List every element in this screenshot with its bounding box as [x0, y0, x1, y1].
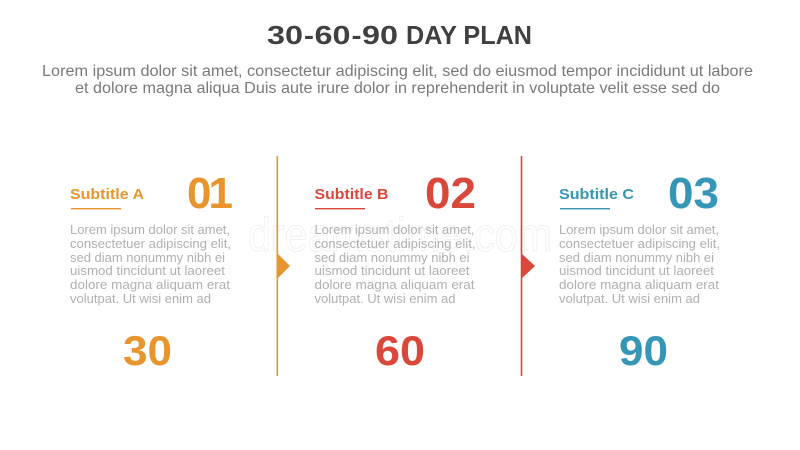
body text C: dolore magna aliquam erat: [559, 278, 720, 292]
underline C: [560, 208, 610, 209]
title: -: [304, 22, 314, 50]
body text B: volutpat. Ut wisi enim ad: [314, 292, 456, 306]
body text C: [559, 223, 720, 306]
body text C: uismod tincidunt ut laoreet: [559, 264, 715, 278]
intro text: Lorem ipsum dolor sit amet, consectetur adipiscing elit, sed do eiusmod tempor incididunt ut labore: [42, 63, 753, 80]
panel: subtitle A, 30 days: [70, 169, 233, 374]
day count 90: 90: [619, 327, 668, 374]
body text B: dolore magna aliquam erat: [314, 278, 475, 292]
body text B: [314, 223, 476, 306]
number 03: 03: [668, 169, 719, 218]
body text A: consectetuer adipiscing elit,: [70, 237, 231, 251]
body text A: volutpat. Ut wisi enim ad: [70, 292, 211, 306]
underline A: [71, 208, 121, 209]
panel: subtitle C, 90 days: [559, 169, 720, 374]
panel: subtitle B, 60 days: [314, 169, 476, 374]
body text B: uismod tincidunt ut laoreet: [314, 264, 470, 278]
body text B: consectetuer adipiscing elit,: [314, 237, 476, 251]
watermark: dreamstime.com: [248, 208, 552, 261]
title: 60: [314, 22, 350, 50]
subtitle A: Subtitle A: [70, 186, 144, 203]
body text A: uismod tincidunt ut laoreet: [70, 264, 226, 278]
title: -: [352, 22, 362, 50]
intro text: [42, 63, 753, 97]
underline B: [315, 208, 365, 209]
day count 60: 60: [375, 327, 425, 374]
body text A: dolore magna aliquam erat: [70, 278, 231, 292]
body text A: Lorem ipsum dolor sit amet,: [70, 223, 230, 237]
body text C: sed diam nonummy nibh ei: [559, 251, 714, 265]
body text B: sed diam nonummy nibh ei: [314, 251, 470, 265]
body text B: Lorem ipsum dolor sit amet,: [314, 223, 474, 237]
subtitle B: Subtitle B: [314, 186, 389, 203]
intro text: et dolore magna aliqua Duis aute irure dolor in reprehenderit in voluptate velit esse sed do: [75, 80, 720, 97]
title: DAY PLAN: [406, 22, 532, 50]
divider arrow: red: [521, 156, 535, 376]
divider arrow: orange: [276, 156, 290, 376]
body text C: volutpat. Ut wisi enim ad: [559, 292, 700, 306]
number 01: 01: [187, 169, 233, 218]
subtitle C: Subtitle C: [559, 186, 634, 203]
body text A: [70, 223, 231, 306]
day count 30: 30: [123, 327, 172, 374]
body text C: Lorem ipsum dolor sit amet,: [559, 223, 719, 237]
title: 30: [267, 22, 303, 50]
number 02: 02: [425, 169, 476, 218]
body text C: consectetuer adipiscing elit,: [559, 237, 720, 251]
title: [267, 22, 532, 50]
body text A: sed diam nonummy nibh ei: [70, 251, 225, 265]
title: 90: [362, 22, 398, 50]
